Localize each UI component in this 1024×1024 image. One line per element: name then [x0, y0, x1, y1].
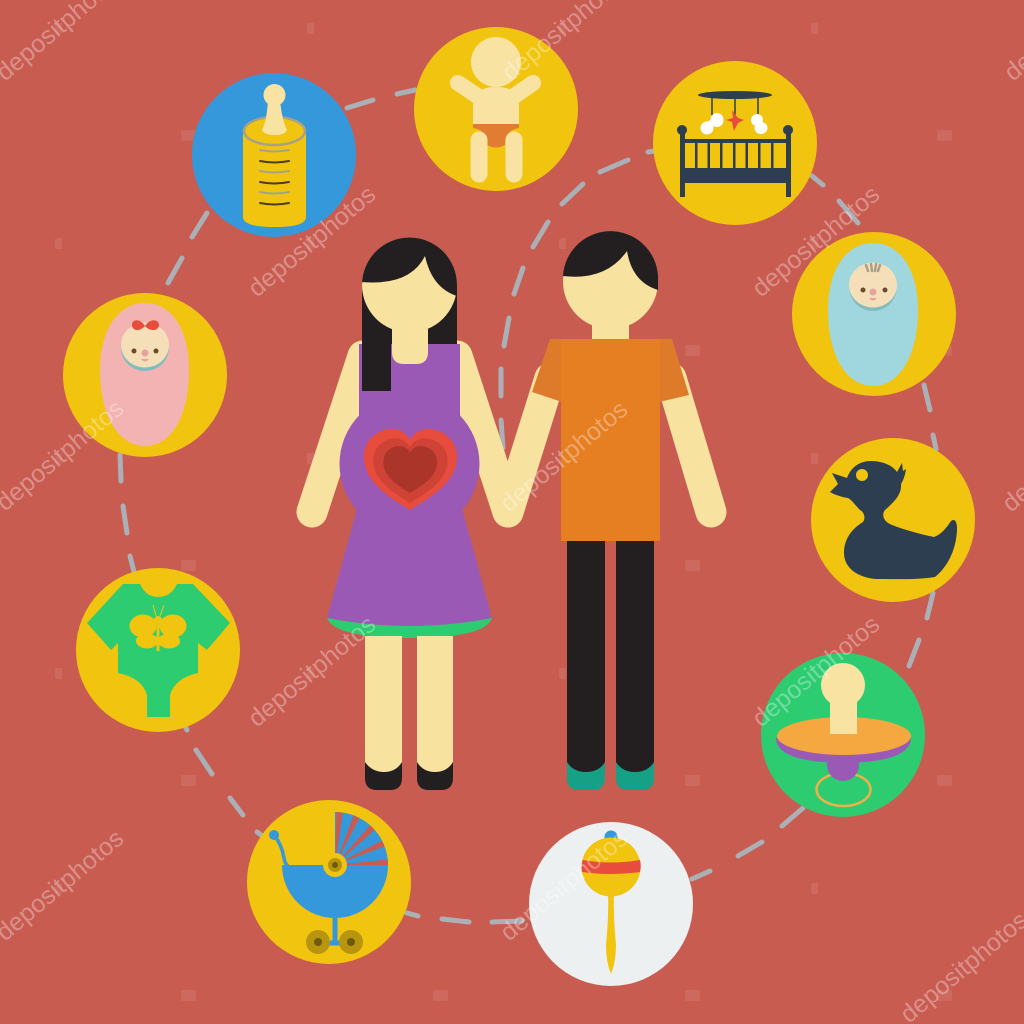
man shoes — [567, 762, 654, 790]
icon: baby in diaper — [414, 27, 578, 191]
duck body — [830, 461, 957, 579]
icon: swaddled baby girl — [63, 293, 227, 457]
boy hair — [866, 264, 880, 271]
stroller wheels — [306, 930, 363, 954]
crib frame — [677, 125, 793, 197]
man shirt — [561, 339, 660, 541]
rattle knob — [604, 830, 618, 844]
boy head shadow — [850, 265, 896, 311]
girl head shadow — [121, 325, 169, 371]
blue swaddle — [828, 243, 918, 386]
stroller handle — [274, 835, 288, 866]
icon: rubber duck — [811, 438, 975, 602]
heart — [364, 429, 457, 510]
watermarks: depositphotos — [243, 610, 381, 733]
man sleeves — [532, 339, 689, 402]
bottle rim — [244, 117, 305, 145]
dashed connecting path — [120, 90, 936, 922]
girl head — [121, 322, 169, 368]
icon: baby stroller — [247, 800, 411, 964]
icon: swaddled baby boy — [792, 232, 956, 396]
baby arms — [458, 83, 533, 99]
stroller basket — [282, 865, 388, 918]
icon: rattle — [529, 822, 693, 986]
watermarks: depositphotos — [243, 180, 381, 303]
woman neck — [392, 300, 428, 364]
stroller hood — [335, 812, 388, 865]
woman face — [362, 238, 457, 332]
pacifier shield — [776, 738, 911, 763]
rattle band — [582, 860, 641, 874]
baby torso — [473, 87, 519, 126]
bodysuit — [87, 584, 230, 717]
woman fringe — [362, 238, 457, 296]
boy head — [849, 262, 897, 308]
diaper — [473, 124, 519, 148]
butterfly — [130, 605, 186, 651]
girl bow — [132, 320, 159, 330]
pacifier ring — [816, 773, 870, 806]
icon: baby bottle — [192, 73, 356, 237]
watermarks: depositphotos — [495, 395, 633, 518]
hood hub — [323, 853, 347, 877]
baby legs — [479, 140, 514, 174]
woman hair strand — [362, 330, 391, 391]
dress hem — [327, 618, 492, 638]
rattle ball — [582, 838, 640, 896]
woman shoes — [365, 762, 453, 790]
woman dress — [327, 344, 492, 626]
girl face — [132, 348, 158, 362]
man hair — [563, 231, 658, 290]
man arms — [508, 378, 711, 512]
pacifier teat — [830, 700, 857, 734]
icon: crib with mobile — [653, 61, 817, 225]
pacifier knob — [827, 749, 859, 781]
watermarks: depositphotos — [747, 610, 885, 733]
watermarks: depositphotos — [747, 180, 885, 303]
woman figure — [312, 238, 508, 790]
rattle handle — [606, 890, 616, 974]
man figure — [508, 231, 711, 790]
man neck — [592, 305, 629, 339]
baby head — [471, 37, 521, 87]
icon: pacifier — [761, 653, 925, 817]
stroller axle — [322, 918, 348, 943]
woman legs — [365, 636, 453, 776]
bottle nipple — [262, 100, 287, 135]
duck eye — [856, 469, 868, 481]
watermarks: depositphotos — [495, 824, 633, 947]
hood ribs — [335, 812, 388, 865]
bottle body — [243, 130, 306, 227]
woman back hair — [362, 238, 457, 350]
woman arms — [312, 356, 508, 512]
icon: baby bodysuit — [76, 568, 240, 732]
man trousers — [567, 538, 654, 773]
boy face — [860, 288, 888, 300]
pink swaddle — [100, 303, 189, 446]
mobile — [698, 91, 772, 134]
measure marks — [260, 150, 289, 204]
man face — [563, 234, 658, 329]
